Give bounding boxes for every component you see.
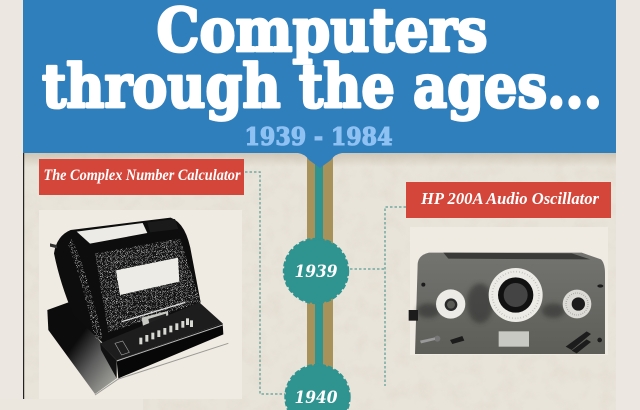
timeline trunk xyxy=(307,153,333,410)
header panel xyxy=(23,0,616,168)
nameplate xyxy=(499,331,529,347)
image: complex number calculator xyxy=(39,210,242,399)
keys xyxy=(139,318,193,344)
right dial xyxy=(563,290,591,318)
main dial xyxy=(489,268,543,322)
badge: 1940: 1940 xyxy=(294,388,338,408)
label: HP 200A Audio Oscillator xyxy=(406,182,611,218)
hardware xyxy=(409,283,603,353)
label: HP 200A Audio Oscillator: HP 200A Audio Oscillator xyxy=(420,189,600,208)
badge: 1940 xyxy=(286,365,350,410)
dial shadows xyxy=(417,283,565,323)
left dial xyxy=(436,289,465,319)
date range: 1939 - 1984 xyxy=(244,122,392,151)
badge: 1939 xyxy=(284,239,348,303)
label: The Complex Number Calculator: The Complex Number Calculator xyxy=(44,167,241,184)
label: The Complex Number Calculator xyxy=(39,159,244,195)
title xyxy=(42,0,602,122)
image: HP 200A audio oscillator xyxy=(409,227,608,355)
connector: dotted lines left xyxy=(245,172,285,394)
badge: 1939: 1939 xyxy=(294,262,338,282)
connector: dotted lines right xyxy=(350,207,406,386)
